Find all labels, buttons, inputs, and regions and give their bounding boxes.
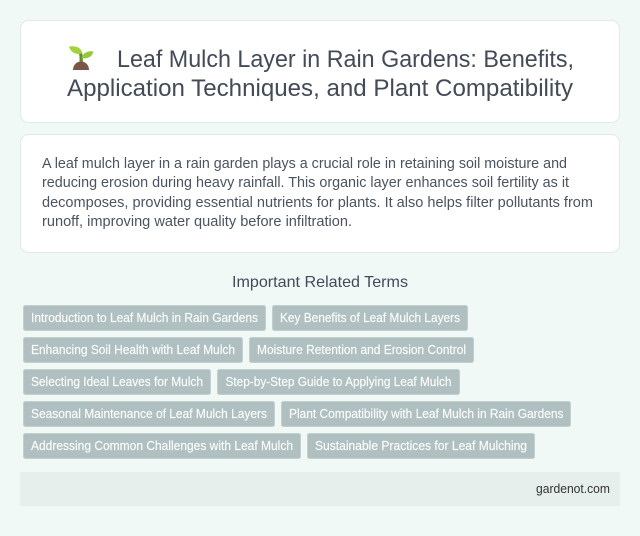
text block: introduction paragraph (42, 156, 593, 230)
tag (308, 434, 534, 458)
title: Application Techniques, and Plant Compatibility (67, 75, 573, 102)
panel: introduction (20, 134, 620, 252)
title (67, 46, 574, 102)
tag: Seasonal Maintenance of Leaf Mulch Layers (31, 407, 267, 421)
tag: Moisture Retention and Erosion Control (257, 343, 466, 357)
panel: title card (20, 20, 620, 122)
tag (272, 306, 468, 330)
tag (282, 402, 570, 426)
tag (24, 402, 274, 426)
footer credit: gardenot.com (536, 482, 610, 496)
tag (218, 370, 460, 394)
icon: seedling (69, 46, 93, 70)
text block: introduction paragraph: A leaf mulch layer in a rain garden plays a crucial role in retaining soil moisture and (42, 156, 567, 172)
tag (24, 338, 242, 362)
tag (250, 338, 474, 362)
text block: introduction paragraph: runoff, improving water quality before infiltration. (42, 214, 352, 230)
tag (24, 434, 300, 458)
tag: Plant Compatibility with Leaf Mulch in Rain Gardens (289, 407, 564, 421)
heading: related terms: Important Related Terms (232, 274, 408, 291)
tag: Introduction to Leaf Mulch in Rain Gardens (31, 311, 258, 325)
tag: Enhancing Soil Health with Leaf Mulch (31, 343, 235, 357)
tag: Step-by-Step Guide to Applying Leaf Mulch (226, 375, 452, 389)
tag: Selecting Ideal Leaves for Mulch (31, 375, 203, 389)
footer (20, 472, 620, 506)
text block: introduction paragraph: reducing erosion during heavy rainfall. This organic layer enhances soil fertility as it (42, 175, 569, 191)
title: Leaf Mulch Layer in Rain Gardens: Benefits, (117, 46, 574, 73)
tag: Addressing Common Challenges with Leaf Mulch (31, 439, 293, 453)
tag list: related terms (24, 306, 570, 458)
tag: Key Benefits of Leaf Mulch Layers (280, 311, 460, 325)
tag (24, 306, 266, 330)
tag (24, 370, 210, 394)
tag: Sustainable Practices for Leaf Mulching (315, 439, 527, 453)
text block: introduction paragraph: decomposes, providing essential nutrients for plants. It also helps filter pollutants from (42, 195, 593, 211)
